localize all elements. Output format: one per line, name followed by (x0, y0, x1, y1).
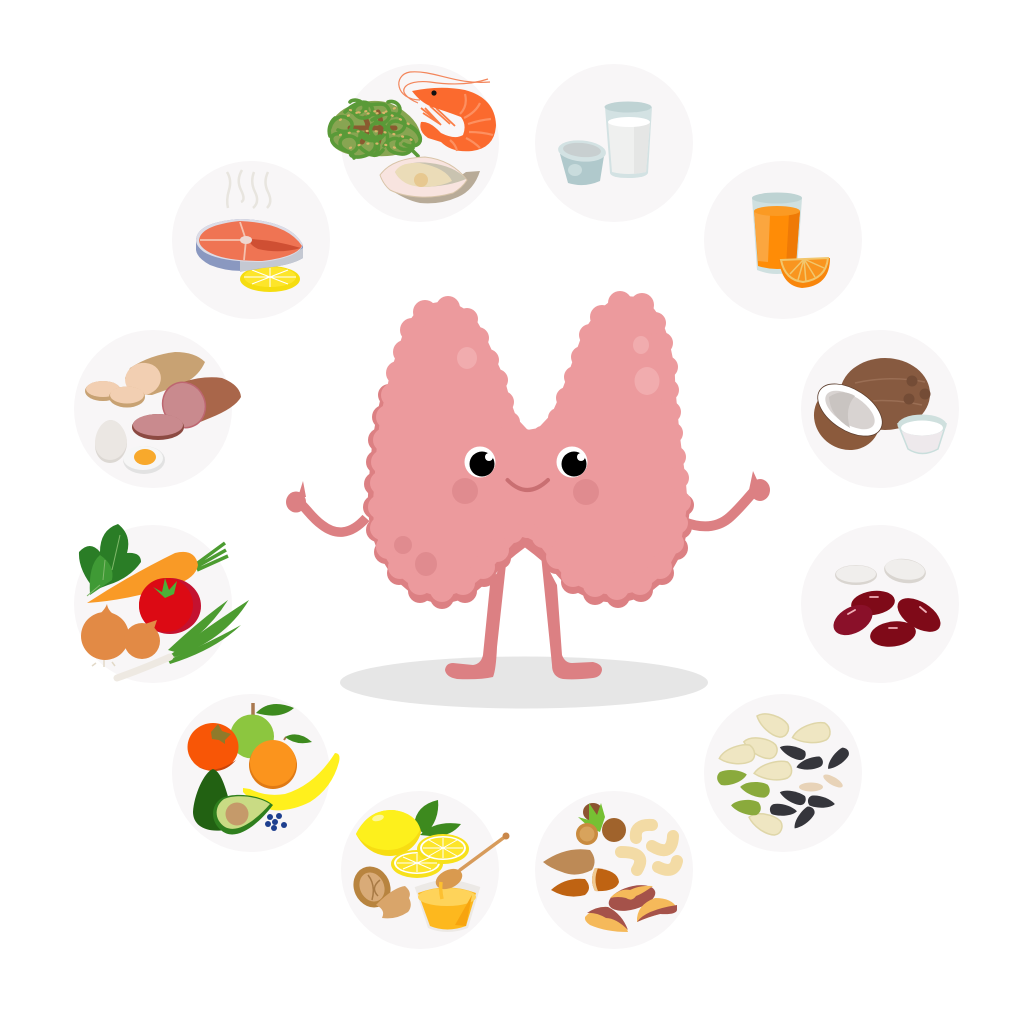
icon: kidney beans (828, 588, 946, 650)
icon: yogurt cup (557, 138, 607, 185)
panel: seeds (704, 694, 862, 852)
icon: persimmon (188, 723, 238, 771)
right eye (556, 446, 588, 478)
thyroid main body (368, 291, 691, 602)
icon: shrimp (399, 72, 496, 151)
icon: carrot (87, 543, 228, 603)
icon: banana (243, 753, 340, 810)
icon: lemon leaves (414, 800, 461, 836)
icon: cashews (621, 825, 677, 870)
icon: honey bowl (415, 880, 480, 932)
icon: walnut (347, 860, 411, 918)
icon: oyster (380, 157, 480, 203)
icon: bowl of coconut milk (898, 414, 946, 454)
icon: green pepitas (716, 767, 771, 816)
panel: orange juice (704, 161, 862, 319)
panel: nuts (535, 791, 693, 949)
icon: half coconut (801, 373, 893, 463)
right arm (684, 471, 770, 526)
icon: spinach (79, 524, 141, 596)
icon: salmon steak (196, 219, 303, 272)
icon: lemon (356, 810, 421, 856)
icon: orange slice (779, 258, 830, 288)
icon: honey dipper (433, 832, 510, 899)
thyroid shadow layer (363, 384, 694, 609)
icon: tomato (139, 578, 201, 634)
left eye (464, 446, 496, 478)
icon: eggs (95, 420, 165, 474)
panel: fruits (172, 694, 340, 852)
icon: brazil nuts (585, 880, 677, 932)
icon: white beans (835, 556, 927, 586)
icon: pale kernels (799, 772, 845, 792)
icon: hazelnuts (576, 803, 626, 845)
panel: meat and eggs (74, 330, 241, 488)
icon: glass of juice (752, 192, 802, 274)
thyroid character (286, 291, 770, 679)
ground shadow (340, 656, 708, 708)
panel: dairy (535, 64, 693, 222)
panel: lemon, walnut and honey (341, 791, 510, 949)
icon: ham (132, 375, 241, 440)
panel: seafood (328, 64, 499, 222)
icon: glass of milk (604, 102, 652, 178)
left leg (445, 555, 507, 679)
icon: orange (249, 734, 312, 789)
icon: whole coconut (840, 358, 930, 430)
icon: almonds (543, 849, 619, 897)
panel: salmon (172, 161, 330, 319)
left arm (286, 481, 366, 532)
panel: coconut (801, 330, 959, 488)
icon: lemon slice (240, 266, 300, 292)
right leg (541, 555, 602, 679)
icon: roast poultry (85, 352, 205, 408)
icon: spring onion (117, 600, 249, 678)
icon: green apple (230, 703, 294, 758)
panel: beans (801, 525, 959, 683)
icon: onions (81, 604, 160, 667)
panel: vegetables (74, 524, 249, 683)
icon: steam (227, 170, 270, 208)
icon: avocado (193, 769, 273, 834)
icon: blueberries (265, 813, 287, 831)
lower spots and cheeks (394, 478, 599, 576)
smile (508, 480, 548, 490)
icon: sunflower seeds (769, 742, 851, 832)
icon: lemon slices (391, 834, 469, 878)
icon: seaweed salad (328, 100, 421, 158)
icon: pumpkin seeds (718, 708, 831, 837)
highlights (457, 336, 660, 395)
